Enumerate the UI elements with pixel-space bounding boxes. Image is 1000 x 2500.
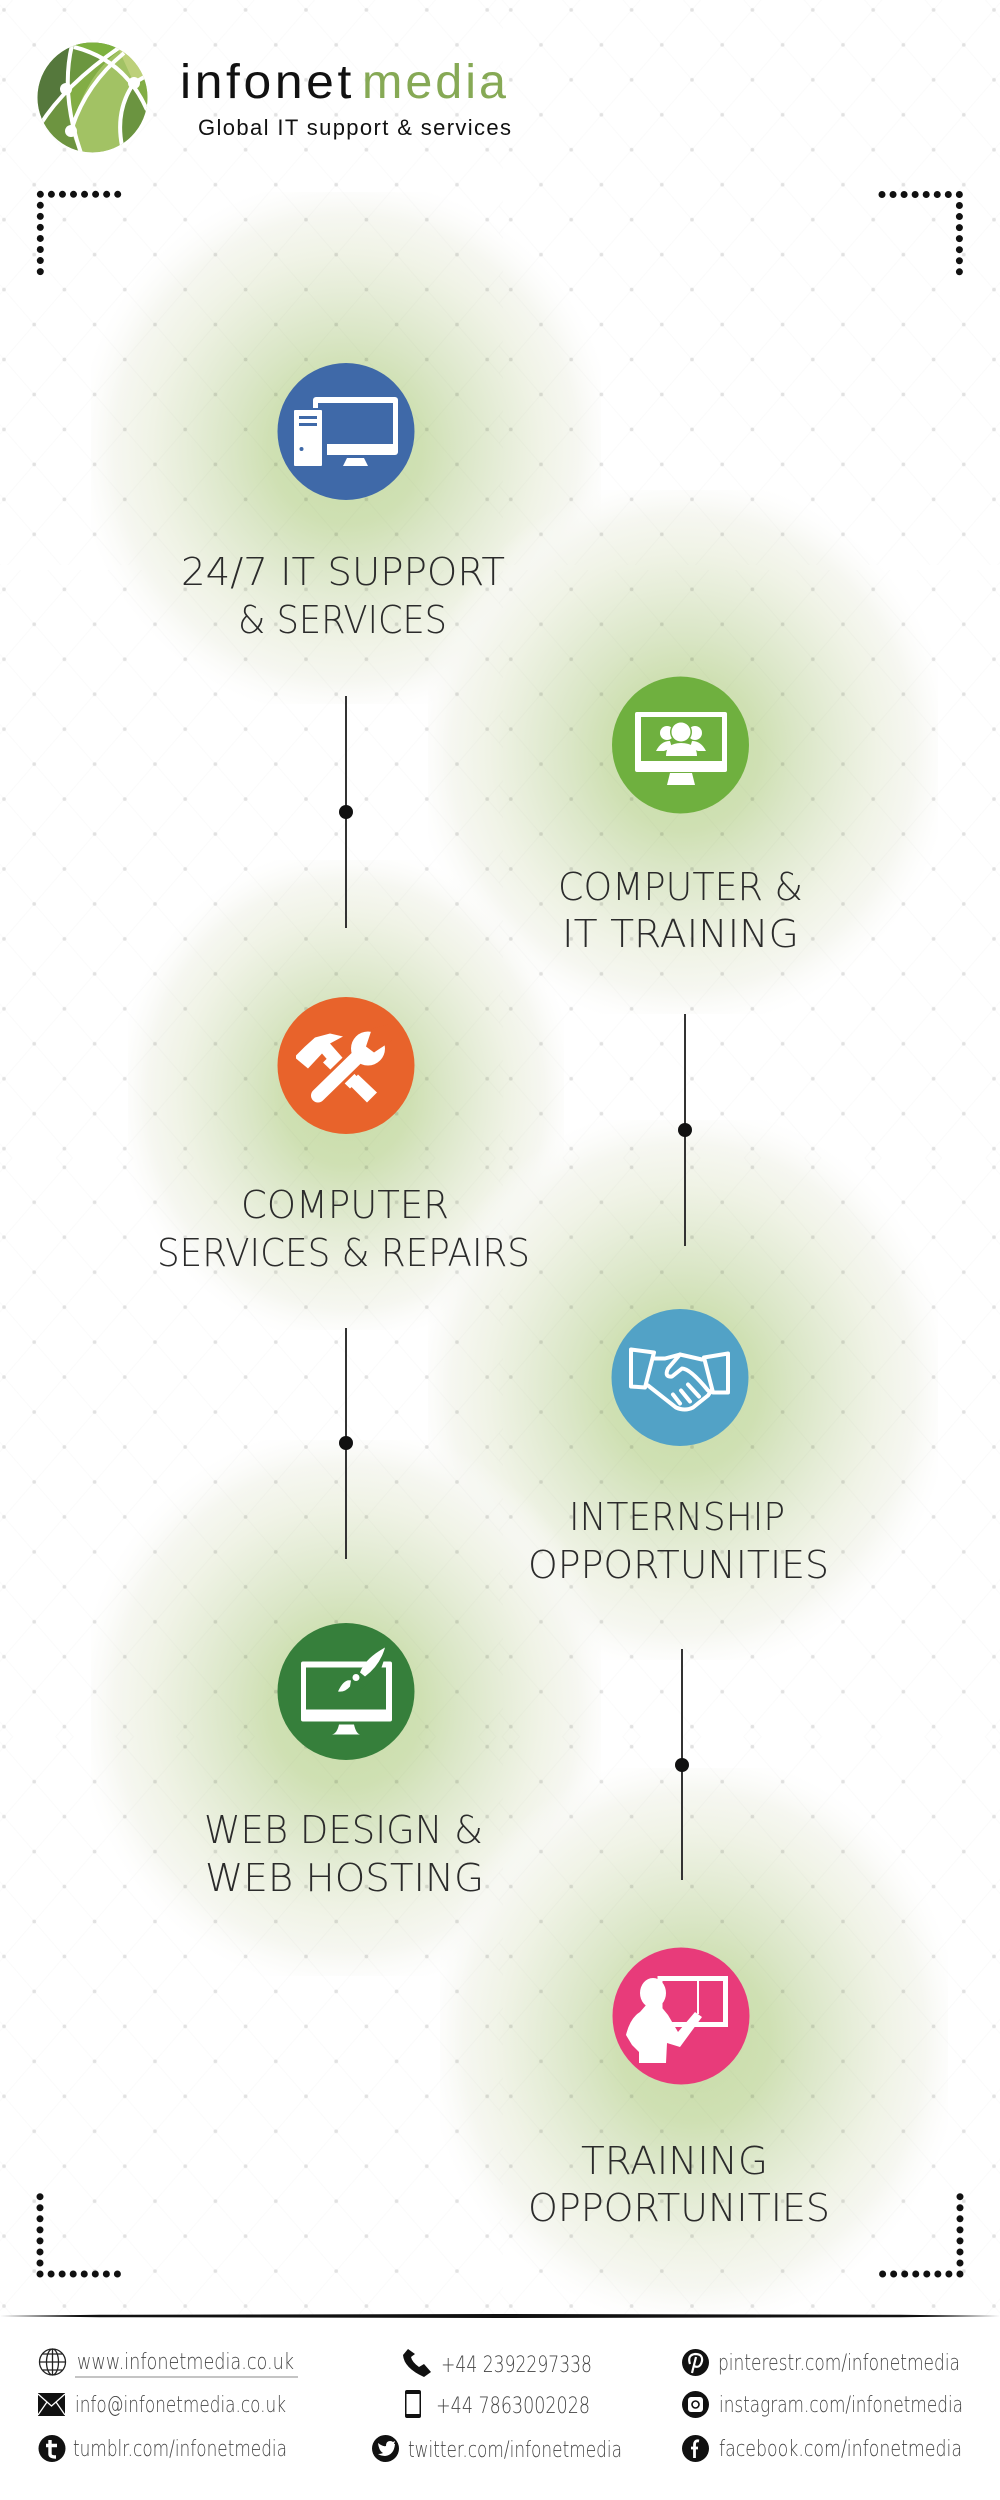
heading: training opportunities: TRAINING (581, 2139, 768, 2183)
logo globe (38, 42, 148, 152)
heading: internship opportunities: OPPORTUNITIES (528, 1543, 829, 1587)
icon: twitter (372, 2435, 399, 2462)
heading: computer & IT training (558, 865, 803, 956)
mobile number: +44 7863002028 (436, 2394, 590, 2419)
green glow backgrounds (91, 192, 948, 2312)
heading: 24/7 support: 24/7 IT SUPPORT (181, 550, 505, 594)
connector 1 (339, 696, 353, 928)
icon: handshake (612, 1309, 748, 1446)
heading: training opportunities (528, 2139, 830, 2230)
email address: info@infonetmedia.co.uk (75, 2393, 286, 2418)
heading: computer services & repairs (157, 1183, 530, 1275)
heading: web design & hosting: WEB HOSTING (205, 1856, 484, 1900)
logo tagline: Global IT support & services (198, 115, 511, 140)
heading: computer services & repairs: SERVICES & REPAIRS (157, 1231, 530, 1275)
footer divider (0, 2314, 1000, 2318)
heading: internship opportunities (528, 1495, 829, 1587)
dotted frame corners (40, 194, 960, 2274)
icon: pinterest (682, 2349, 709, 2376)
icon: phone (403, 2349, 431, 2377)
phone number: +44 2392297338 (441, 2353, 592, 2378)
heading: 24/7 support (181, 550, 505, 642)
icon: monitor with paintbrush (278, 1623, 414, 1760)
heading: web design & hosting (204, 1808, 484, 1900)
heading: computer & IT training: IT TRAINING (562, 912, 799, 956)
website link: www.infonetmedia.co.uk (77, 2350, 294, 2375)
connector 2 (678, 1014, 692, 1246)
icon: trainer at board (612, 1948, 750, 2084)
icon: mobile (405, 2390, 421, 2418)
logo wordmark: infonet (180, 56, 355, 109)
connector 4 (675, 1649, 689, 1880)
icon: tumblr (38, 2435, 66, 2462)
footer panel (0, 2316, 1000, 2500)
icon: desktop computer (278, 363, 414, 500)
logo wordmark (180, 56, 509, 109)
heading: internship opportunities: INTERNSHIP (569, 1495, 785, 1539)
heading: computer & IT training: COMPUTER & (558, 865, 803, 909)
icon: hammer and wrench (278, 997, 414, 1134)
icon: globe (40, 2349, 66, 2375)
heading: computer services & repairs: COMPUTER (241, 1183, 449, 1227)
heading: 24/7 support: & SERVICES (238, 598, 447, 642)
icon: instagram (682, 2391, 709, 2418)
twitter link: twitter.com/infonetmedia (408, 2438, 622, 2463)
icon: facebook (682, 2435, 709, 2462)
heading: web design & hosting: WEB DESIGN & (204, 1808, 483, 1852)
heading: training opportunities: OPPORTUNITIES (528, 2186, 830, 2230)
tumblr link: tumblr.com/infonetmedia (73, 2437, 287, 2462)
logo wordmark: media (362, 56, 509, 109)
icon: training monitor (612, 676, 749, 814)
icon: email (38, 2393, 65, 2416)
connector 3 (339, 1328, 353, 1559)
